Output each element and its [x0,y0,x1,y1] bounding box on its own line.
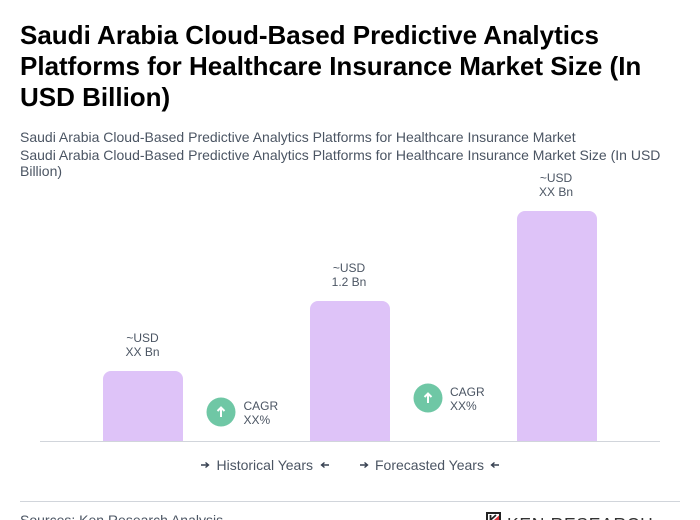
arrow: right [201,462,210,468]
CAGR label 1: CAGR [244,399,278,413]
logo: Ken Research [486,512,654,520]
CAGR label 1: XX% [244,413,270,427]
CAGR label 2 [450,385,485,413]
description: Saudi Arabia Cloud-Based Predictive Analytics Platforms for Healthcare Insurance Market Size (In USD Billion) [20,147,660,179]
bar 3 value: ~USD [540,171,572,185]
CAGR label 1 [244,399,278,427]
bar 1 value: ~USD [126,331,159,345]
arrow: left [320,462,329,468]
bar 1 value: XX Bn [125,345,160,359]
bar 3 [517,211,597,441]
arrow: left [490,462,499,468]
legend label: forecasted: Forecasted Years [375,457,484,473]
arrow: right [360,462,368,468]
CAGR label 2: XX% [450,399,477,413]
footer divider [20,501,680,502]
legend: historical years [201,457,329,473]
bar 1 [103,371,183,441]
bar 2 value: 1.2 Bn [332,275,366,289]
bar 1 value [125,331,160,359]
icon: CAGR up arrow 2 [414,384,442,412]
axis line [40,441,660,442]
icon: CAGR up arrow 1 [206,398,236,426]
legend label: historical: Historical Years [216,457,313,473]
bar 2 value: ~USD [333,261,365,275]
bar chart [40,171,660,442]
bar 3 value: XX Bn [539,185,573,199]
bar 2 value [332,261,366,289]
legend: forecasted years [360,457,499,473]
CAGR label 2: CAGR [450,385,485,399]
logo mark [486,512,501,520]
subtitle: Saudi Arabia Cloud-Based Predictive Analytics Platforms for Healthcare Insurance Market [20,129,576,145]
bar 3 value [539,171,573,199]
bar 2 [310,301,390,441]
title: Saudi Arabia Cloud-Based Predictive Analytics Platforms for Healthcare Insurance Market Size (In USD Billion) [20,20,641,112]
